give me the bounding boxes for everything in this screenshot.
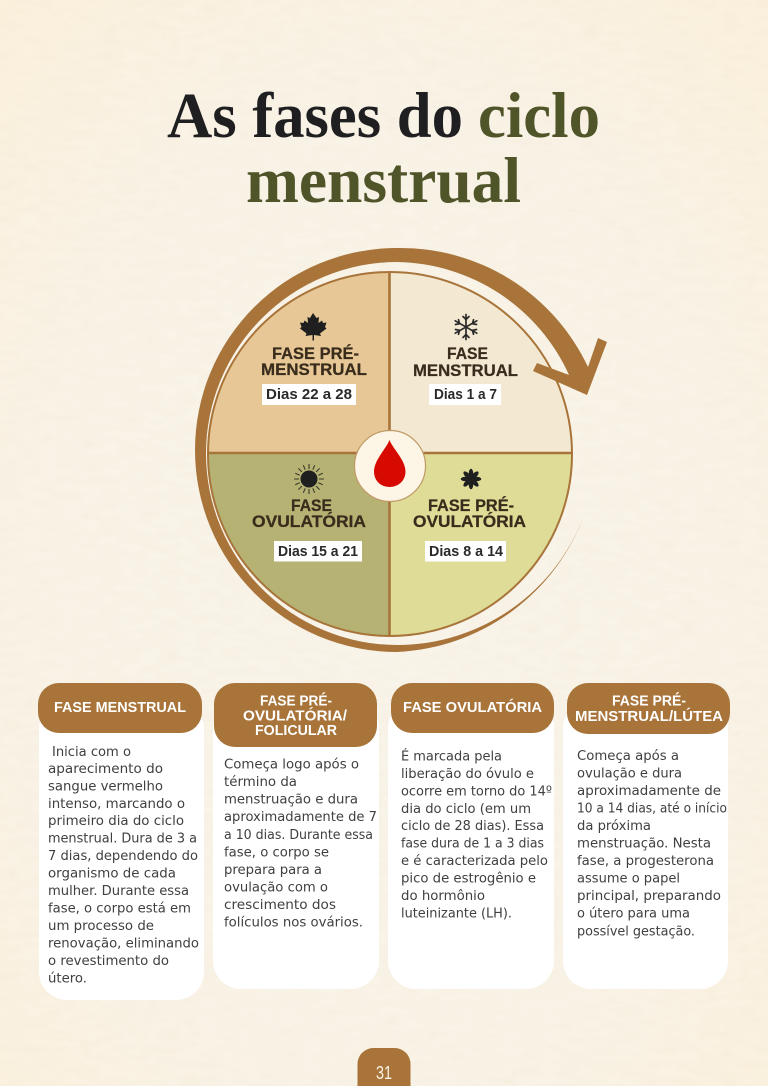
card text: principal, preparando (577, 889, 721, 904)
card text: útero. (48, 970, 87, 986)
arrow: circular cycle arrow (195, 248, 607, 652)
cycle wheel diagram (195, 248, 607, 652)
page number tab: 31 (376, 1063, 392, 1083)
wheel outline and dividers (208, 272, 572, 636)
card header: FASE PRÉ- (612, 692, 686, 710)
label: fase menstrual (413, 345, 518, 380)
card text: sangue vermelho (48, 780, 163, 794)
title: menstrual (246, 145, 521, 217)
card text: do hormônio (401, 888, 485, 904)
card text: ocorre em torno do 14º (401, 784, 552, 800)
card text: menstruação. Nesta (577, 836, 711, 852)
label: fase pré-ovulatória: FASE PRÉ- (428, 496, 514, 515)
quadrant: fase menstrual (390, 272, 572, 454)
card: fase pré-ovulatória/folicular (213, 683, 379, 989)
card header: MENSTRUAL/LÚTEA (575, 707, 724, 725)
card text: renovação, eliminando (48, 936, 199, 952)
title (167, 80, 600, 217)
card text: Inicia com o (52, 745, 131, 760)
card text: pico de estrogênio e (401, 870, 536, 886)
card text: Começa logo após o (224, 756, 359, 772)
card header: FASE MENSTRUAL (54, 700, 186, 716)
card text: fase, o corpo está em (48, 900, 191, 916)
label: fase menstrual: FASE (447, 345, 488, 363)
days badge: 1 a 7: Dias 1 a 7 (434, 386, 497, 403)
card: fase pré-menstrual/lútea (563, 683, 730, 989)
days badge: 8 a 14: Dias 8 a 14 (429, 543, 504, 560)
card text: um processo de (48, 919, 154, 934)
card header: OVULATÓRIA/ (243, 706, 347, 724)
center badge with blood drop (354, 430, 426, 502)
card header (38, 683, 202, 733)
card text (224, 756, 377, 930)
card text: o útero para uma (577, 906, 690, 922)
card header (391, 683, 554, 733)
card header: FOLICULAR (255, 723, 338, 739)
card text: assume o papel (577, 872, 680, 886)
title: As fases do (167, 80, 463, 152)
icon: snowflake (455, 314, 477, 340)
card text: prepara para a (224, 863, 322, 878)
label: fase pré-menstrual: FASE PRÉ- (272, 344, 359, 363)
card text: ciclo de 28 dias). Essa (401, 819, 544, 834)
label: fase ovulatória (252, 497, 366, 531)
card text: aproximadamente de 7 (224, 810, 377, 825)
card text (401, 748, 552, 922)
card text: término da (224, 774, 297, 790)
label: fase pré-ovulatória (413, 496, 526, 531)
card text: dia do ciclo (em um (401, 802, 531, 817)
card text: intenso, marcando o (48, 797, 185, 812)
card: fase ovulatória (388, 683, 554, 989)
card text: fase, o corpo se (224, 846, 329, 860)
label: fase ovulatória: OVULATÓRIA (252, 512, 366, 531)
label: fase ovulatória: FASE (291, 497, 332, 515)
quadrant: fase ovulatória (208, 454, 390, 636)
quadrant: fase pré-ovulatória (390, 454, 572, 636)
card text: Começa após a (577, 748, 679, 764)
card header (567, 683, 730, 734)
card text: mulher. Durante essa (48, 884, 189, 899)
icon: flower (461, 469, 481, 489)
card text: organismo de cada (48, 866, 176, 882)
days badge: 15 a 21: Dias 15 a 21 (278, 543, 358, 560)
card text: possível gestação. (577, 924, 695, 940)
card text: aproximadamente de (577, 784, 721, 799)
card text: primeiro dia do ciclo (48, 814, 184, 829)
card text: crescimento dos (224, 898, 336, 913)
icon: blood drop (374, 440, 406, 487)
card text: 7 dias, dependendo do (48, 849, 198, 864)
card header (214, 683, 377, 747)
card text: luteinizante (LH). (401, 906, 512, 922)
card header: FASE PRÉ- (260, 692, 332, 710)
card text: da próxima (577, 818, 651, 834)
quadrant: fase pré-menstrual (208, 272, 390, 454)
card text: menstrual. Dura de 3 a (48, 832, 197, 846)
card text: fase dura de 1 a 3 dias (401, 836, 544, 852)
card header: FASE OVULATÓRIA (403, 698, 543, 716)
card text: 10 a 14 dias, até o início (577, 800, 727, 816)
card text: liberação do óvulo e (401, 766, 534, 782)
label: fase pré-ovulatória: OVULATÓRIA (413, 512, 526, 531)
label: fase menstrual: MENSTRUAL (413, 362, 518, 380)
label: fase pré-menstrual: MENSTRUAL (261, 361, 367, 379)
title: ciclo (478, 80, 600, 152)
days badge: 22 a 28: Dias 22 a 28 (266, 386, 352, 403)
card text (48, 745, 199, 986)
card text: ovulação e dura (577, 766, 682, 782)
card text (577, 748, 727, 940)
card text: e é caracterizada pelo (401, 853, 548, 869)
page number tab (358, 1048, 410, 1086)
card: fase menstrual (38, 683, 204, 1000)
card text: ovulação com o (224, 880, 328, 896)
card text: aparecimento do (48, 762, 163, 777)
label: fase pré-menstrual (261, 344, 367, 379)
card text: a 10 dias. Durante essa (224, 828, 373, 843)
card text: É marcada pela (401, 748, 502, 764)
card text: fase, a progesterona (577, 854, 714, 869)
icon: maple leaf (300, 313, 326, 340)
card text: o revestimento do (48, 954, 169, 969)
card text: menstruação e dura (224, 792, 358, 808)
card text: folículos nos ovários. (224, 914, 363, 930)
icon: sun (294, 464, 324, 494)
